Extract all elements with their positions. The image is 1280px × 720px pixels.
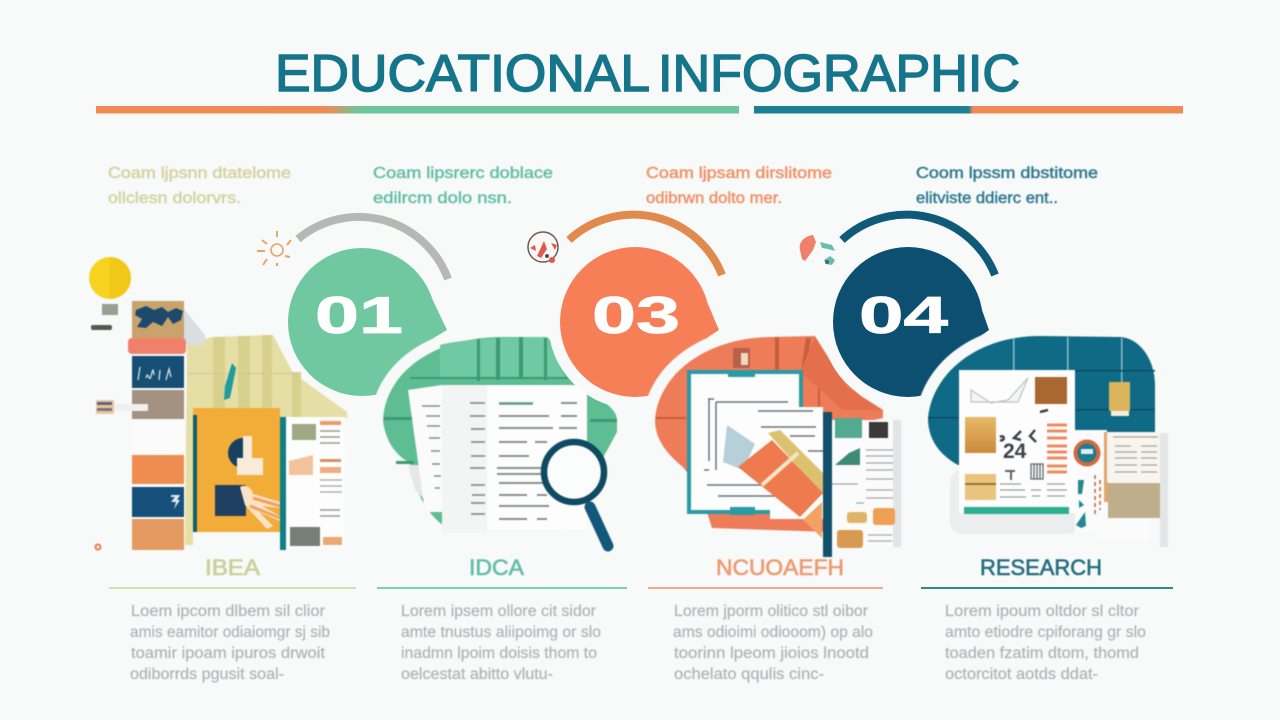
divider IDEA xyxy=(109,587,356,589)
intro text 3: Coam ljpsam dirslitome xyxy=(646,165,832,182)
body text 4: toaden fzatim dtom, thomd xyxy=(945,645,1139,662)
title rule left xyxy=(96,106,739,114)
body text 3: toorinn lpeom jioios lnootd xyxy=(674,645,869,662)
number badge 04 xyxy=(821,235,995,409)
divider IDCA xyxy=(377,587,627,589)
icon: teal pen xyxy=(224,363,236,400)
orange book xyxy=(193,408,280,532)
body text 4: Lorem ipoum oltdor sl cltor xyxy=(945,603,1139,620)
orange eraser xyxy=(738,430,823,517)
title rule right xyxy=(754,106,1183,114)
divider RESEARCH xyxy=(921,587,1173,589)
intro text 1: Coam ljpsnn dtatelome xyxy=(108,165,291,182)
body text 1: odiborrds pgusit soal- xyxy=(130,666,284,683)
body text 1: toamir ipoam ipuros drwoit xyxy=(131,645,326,662)
arc 4 xyxy=(842,215,995,275)
icon: magnifier xyxy=(544,442,608,546)
step 3 illustration: clipboard and folder xyxy=(655,336,901,557)
striped backdrop xyxy=(183,308,347,545)
icon: compass sketch xyxy=(528,232,558,263)
number badge 04: 04 xyxy=(859,287,948,345)
intro text 3: odibrwn dolto mer. xyxy=(646,190,782,207)
report page: 24 xyxy=(1003,440,1027,463)
divider NCUOAEFH xyxy=(648,587,883,589)
small ring xyxy=(96,544,100,550)
intro text 4 xyxy=(916,165,1098,207)
hanging tag xyxy=(1109,382,1130,416)
body text 3: ams odioimi odiooom) op alo xyxy=(673,624,873,641)
report page xyxy=(959,370,1075,514)
intro text 4: Coom lpssm dbstitome xyxy=(916,165,1098,182)
body text 2: oelcestat abitto vlutu- xyxy=(401,666,553,683)
title xyxy=(275,45,1020,103)
icon: sun sketch xyxy=(257,231,291,266)
body text 1: amis eamitor odiaiomgr sj sib xyxy=(130,624,330,641)
side collage xyxy=(1075,430,1168,547)
number badge 03 xyxy=(548,235,722,409)
intro text 1 xyxy=(108,165,291,207)
body text 1 xyxy=(130,603,330,683)
small tag xyxy=(96,400,148,414)
spine and side page xyxy=(803,412,901,557)
body text 2 xyxy=(401,603,601,683)
body text 4: octorcitot aotds ddat- xyxy=(945,666,1098,683)
step label IDEA: IBEA xyxy=(205,555,260,580)
teal blob xyxy=(928,336,1155,470)
body text 2: inadmn lpoim doisis thom to xyxy=(401,645,597,662)
body text 3 xyxy=(673,603,873,683)
step label NCUOAEFH: NCUOAEFH xyxy=(716,555,844,580)
green blob xyxy=(383,337,617,530)
number badge 03: 03 xyxy=(592,287,680,345)
intro text 2: Coam lipsrerc doblace xyxy=(373,165,553,182)
title: EDUCATIONAL xyxy=(275,45,650,103)
intro text 4: elitviste ddierc ent.. xyxy=(916,190,1058,207)
step 2 illustration: documents and magnifier xyxy=(383,337,617,546)
step 1 illustration: idea stack and book xyxy=(89,257,347,550)
intro text 2: edilrcm dolo nsn. xyxy=(373,190,512,207)
document pages xyxy=(408,385,587,533)
step label RESEARCH: RESEARCH xyxy=(980,555,1102,580)
intro text 3 xyxy=(646,165,832,207)
body text 4: amto etiodre cpiforang gr slo xyxy=(945,624,1146,641)
coral blob xyxy=(655,336,883,532)
number badge 01: 01 xyxy=(315,287,403,345)
body text 2: amte tnustus aliipoimg or slo xyxy=(401,624,601,641)
intro text 1: ollclesn dolorvrs. xyxy=(108,190,241,207)
title: INFOGRAPHIC xyxy=(658,45,1020,103)
step label IDCA: IDCA xyxy=(469,555,524,580)
arc 3 xyxy=(569,215,722,275)
body text 4 xyxy=(945,603,1146,683)
number badge 01 xyxy=(288,248,447,396)
shadow xyxy=(950,470,1080,534)
intro text 2 xyxy=(373,165,553,207)
icon: splash sketch xyxy=(800,235,835,265)
body text 1: Loem ipcom dlbem sil clior xyxy=(131,603,325,620)
icon: light bulb xyxy=(89,257,131,330)
book page xyxy=(280,417,345,550)
body text 3: ochelato qqulis cinc- xyxy=(674,666,824,683)
step 4 illustration: research boards xyxy=(928,336,1168,547)
colour block stack xyxy=(128,301,186,550)
arc 1 xyxy=(298,217,448,279)
clipboard xyxy=(689,370,823,519)
body text 2: Lorem ipsem ollore cit sidor xyxy=(401,603,596,620)
body text 3: Lorem jporm olitico stl oibor xyxy=(674,603,868,620)
